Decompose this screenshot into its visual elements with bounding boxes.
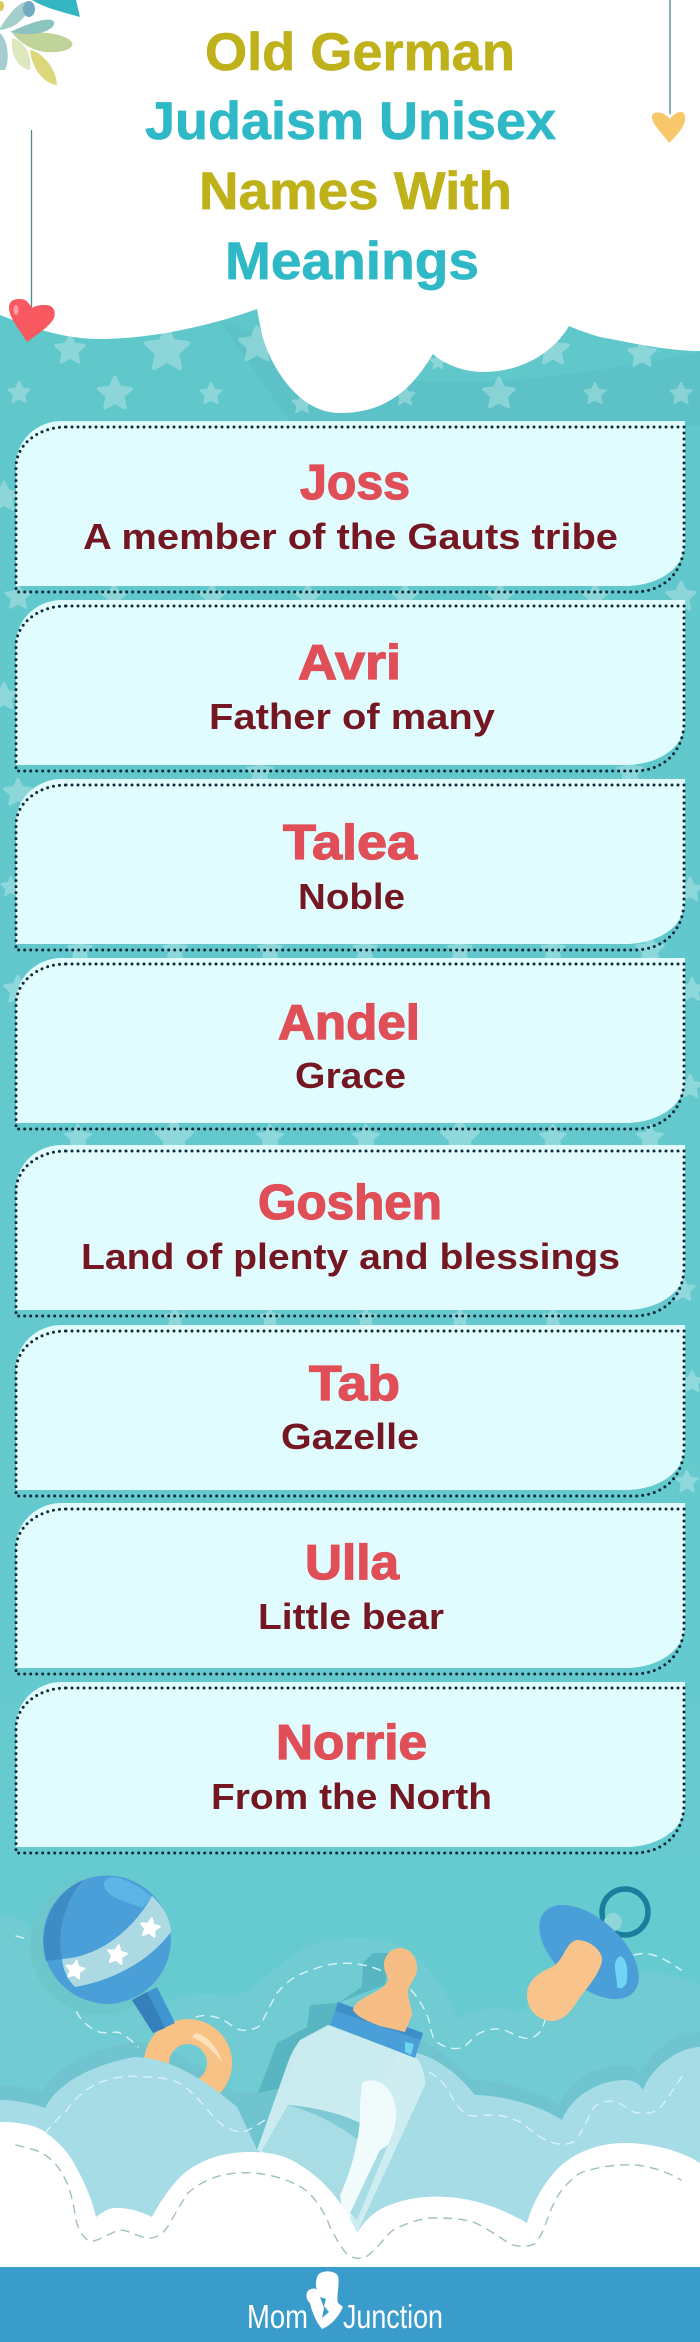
card: Andel: Grace (295, 1055, 406, 1096)
icon: rattle (30, 1875, 222, 2094)
card: Ulla: Little bear (258, 1596, 444, 1637)
bottle shadow (258, 1953, 390, 2093)
card: Norrie: Norrie (276, 1716, 427, 1770)
card: Avri: Father of many (209, 696, 495, 737)
dashed line: upper (16, 1936, 681, 2049)
card: Talea: Talea (283, 816, 418, 870)
card: Joss: Joss (300, 456, 410, 510)
card: Joss: A member of the Gauts tribe (83, 516, 618, 557)
title: Judaism Unisex (145, 92, 557, 151)
rattle stars (65, 1917, 161, 1979)
logo: MomJunction (247, 2271, 443, 2335)
logo: MomJunction: Junction (343, 2298, 443, 2335)
dashed line: middle (45, 2072, 683, 2144)
card: Norrie: From the North (211, 1776, 492, 1817)
header cloud (0, 0, 700, 413)
card: Goshen: Land of plenty and blessings (81, 1236, 620, 1277)
bottle glass (257, 2025, 425, 2233)
title: Old German (205, 23, 515, 82)
card: Avri: Avri (298, 636, 401, 690)
dashed line: lower (16, 2145, 681, 2258)
card: Tab: Tab (309, 1357, 400, 1411)
card: Norrie (16, 1682, 685, 1853)
icon: hanging red heart (9, 130, 55, 342)
bottle nipple (353, 1948, 417, 2032)
title (145, 23, 557, 291)
card: Andel (16, 958, 685, 1129)
white foreground cloud (0, 2122, 700, 2268)
flag corner (32, 0, 80, 17)
card: Ulla (16, 1503, 685, 1674)
title: Names With (199, 162, 512, 221)
cloud layer: dark band (0, 2030, 700, 2300)
card: Tab (16, 1325, 685, 1496)
card: Tab: Gazelle (281, 1416, 419, 1457)
card: Andel: Andel (278, 996, 420, 1050)
icon: baby bottle (257, 1948, 425, 2233)
card: Goshen (16, 1145, 685, 1316)
card: Ulla: Ulla (305, 1536, 400, 1590)
cloud layer: light blue (0, 2047, 700, 2300)
title: Meanings (225, 232, 479, 291)
card: Joss (16, 421, 685, 592)
logo silhouette (306, 2271, 343, 2329)
logo: MomJunction: Mom (247, 2298, 308, 2335)
card: Goshen: Goshen (258, 1176, 442, 1230)
footer bar (0, 2267, 700, 2342)
icon: pacifier (522, 1887, 656, 2021)
bottle cap (330, 2002, 423, 2058)
rattle ring (156, 2032, 220, 2094)
card: Avri (16, 600, 685, 771)
card: Talea (16, 779, 685, 950)
card: Talea: Noble (298, 876, 405, 917)
faint back cloud (0, 1915, 700, 2300)
icon: hanging yellow heart (652, 0, 685, 143)
icon: watercolor leaves (0, 1, 72, 85)
